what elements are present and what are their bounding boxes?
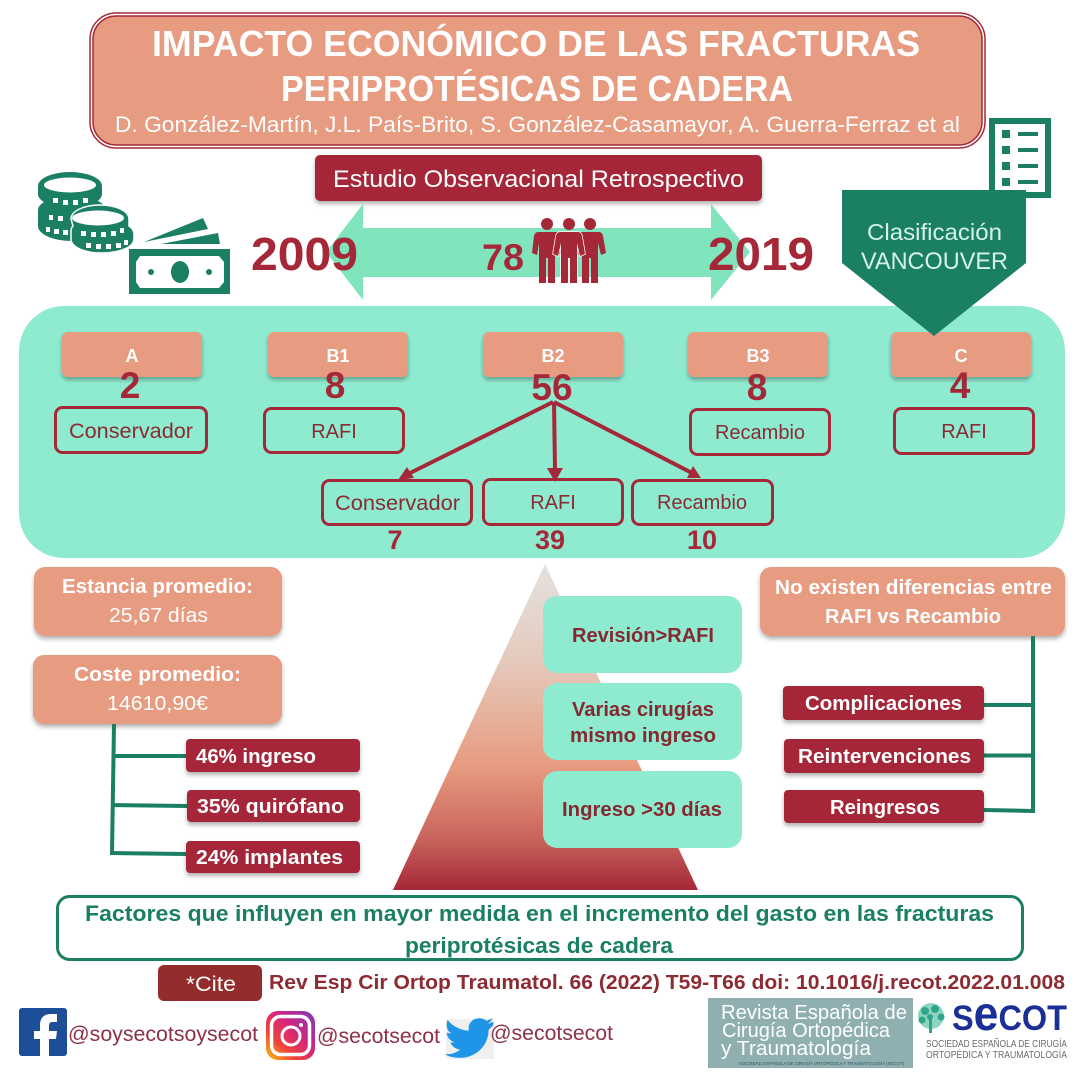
journal logo: Revista Española de	[721, 1001, 907, 1024]
type B1: 8	[325, 365, 345, 406]
outcome: reintervenciones	[784, 739, 984, 773]
type A	[56, 332, 206, 452]
cost breakdown: quirófano: 35% quirófano	[197, 796, 344, 818]
type C	[891, 332, 1034, 454]
stat: average stay: 25,67 días	[109, 605, 208, 627]
title text: PERIPROTÉSICAS DE CADERA	[281, 68, 793, 109]
outcome: reingresos: Reingresos	[830, 797, 940, 819]
type B1: B1	[326, 346, 350, 366]
cost connector	[112, 724, 187, 854]
no differences box	[760, 567, 1065, 636]
type B2: 56	[531, 367, 573, 408]
year start: 2009	[251, 228, 358, 280]
SECOT logo	[918, 988, 1067, 1061]
stat: average cost: 14610,90€	[107, 693, 208, 715]
cost breakdown: quirófano	[187, 790, 360, 822]
journal logo: Cirugía Ortopédica	[722, 1019, 891, 1042]
factor: varias cirugías: Varias cirugías	[572, 699, 714, 721]
icon: checklist	[992, 121, 1048, 195]
stat: average stay	[34, 567, 282, 636]
type C: RAFI	[941, 421, 987, 443]
SECOT logo: SeCOT	[952, 988, 1067, 1041]
outcome: reingresos	[784, 790, 984, 823]
facebook handle: @soysecotsoysecot	[68, 1023, 258, 1046]
year end: 2019	[708, 228, 814, 280]
authors: D. González-Martín, J.L. País-Brito, S. González-Casamayor, A. Guerra-Ferraz et al	[115, 112, 960, 137]
icon: banknotes	[129, 218, 230, 294]
cost breakdown: implantes	[186, 841, 360, 873]
cost breakdown: ingreso: 46% ingreso	[196, 746, 316, 768]
type B2	[483, 332, 623, 408]
B2 conservador: 7	[387, 525, 403, 555]
twitter handle: @secotsecot	[490, 1022, 613, 1045]
icon: facebook	[19, 1008, 67, 1056]
factor: varias cirugías	[543, 683, 742, 760]
Vancouver classification arrow: Clasificación	[867, 219, 1002, 245]
type B2: B2	[541, 346, 565, 366]
type A: Conservador	[69, 420, 193, 443]
pyramid	[393, 564, 698, 890]
outcome: reintervenciones: Reintervenciones	[798, 746, 971, 768]
study type banner	[315, 155, 762, 201]
factor: revisión	[543, 596, 742, 673]
outcome: complicaciones	[783, 686, 984, 720]
study type banner: Estudio Observacional Retrospectivo	[333, 166, 744, 193]
type C: C	[954, 346, 968, 366]
title banner	[90, 13, 985, 148]
cite badge	[158, 965, 262, 1001]
B2 RAFI: 39	[535, 525, 565, 555]
stat: average stay: Estancia promedio:	[62, 576, 253, 598]
icon: instagram	[266, 1011, 315, 1060]
factor: ingreso largo: Ingreso >30 días	[562, 799, 722, 821]
patient count: 78	[482, 237, 524, 278]
factor: revisión: Revisión>RAFI	[572, 625, 714, 647]
cost breakdown: ingreso	[186, 739, 360, 772]
icon: twitter	[445, 1018, 494, 1059]
main classification panel	[19, 306, 1065, 558]
Vancouver classification arrow: VANCOUVER	[861, 248, 1008, 275]
B2 recambio	[632, 480, 772, 555]
outcomes connector	[984, 636, 1033, 811]
instagram handle: @secotsecot	[317, 1025, 440, 1048]
B2 recambio: 10	[687, 525, 717, 555]
type B3: Recambio	[715, 422, 805, 444]
B2 RAFI: RAFI	[530, 492, 576, 514]
conclusion box	[58, 896, 1022, 960]
Vancouver classification arrow	[842, 190, 1026, 336]
stat: average cost	[33, 655, 282, 724]
type B1: RAFI	[311, 421, 357, 443]
type C: 4	[950, 365, 971, 406]
B2 recambio: Recambio	[657, 492, 747, 514]
type A: A	[126, 346, 138, 366]
type B3: B3	[746, 346, 770, 366]
type A: 2	[120, 365, 140, 406]
B2 conservador: Conservador	[335, 492, 460, 515]
type B3	[688, 332, 830, 454]
factor: ingreso largo	[543, 771, 742, 848]
icon: tree	[918, 1003, 944, 1033]
type B1	[264, 332, 408, 452]
no differences box: No existen diferencias entre	[775, 577, 1052, 599]
icon: coins	[38, 172, 134, 253]
outcome: complicaciones: Complicaciones	[805, 693, 962, 715]
cost breakdown: implantes: 24% implantes	[196, 847, 343, 869]
conclusion box: Factores que influyen en mayor medida en el incremento del gasto en las fracturas	[85, 901, 994, 926]
icon: people	[532, 218, 606, 283]
arrows from B2	[398, 402, 701, 482]
title text: IMPACTO ECONÓMICO DE LAS FRACTURAS	[152, 22, 920, 64]
journal logo	[708, 998, 913, 1068]
citation text: Rev Esp Cir Ortop Traumatol. 66 (2022) T59-T66 doi: 10.1016/j.recot.2022.01.008	[269, 972, 1065, 994]
title text	[152, 22, 920, 109]
conclusion box: periprotésicas de cadera	[405, 933, 674, 958]
double arrow: study period	[326, 204, 750, 300]
factor: varias cirugías: mismo ingreso	[570, 725, 716, 747]
journal logo: y Traumatología	[721, 1037, 872, 1060]
type B3: 8	[747, 367, 767, 408]
journal logo: SOCIEDAD ESPAÑOLA DE CIRUGÍA ORTOPÉDICA Y TRAUMATOLOGÍA (SECOT)	[739, 1060, 904, 1066]
no differences box: RAFI vs Recambio	[825, 606, 1001, 628]
cite badge: *Cite	[186, 973, 236, 996]
B2 conservador	[322, 480, 472, 555]
stat: average cost: Coste promedio:	[74, 664, 241, 686]
B2 RAFI	[484, 480, 622, 555]
